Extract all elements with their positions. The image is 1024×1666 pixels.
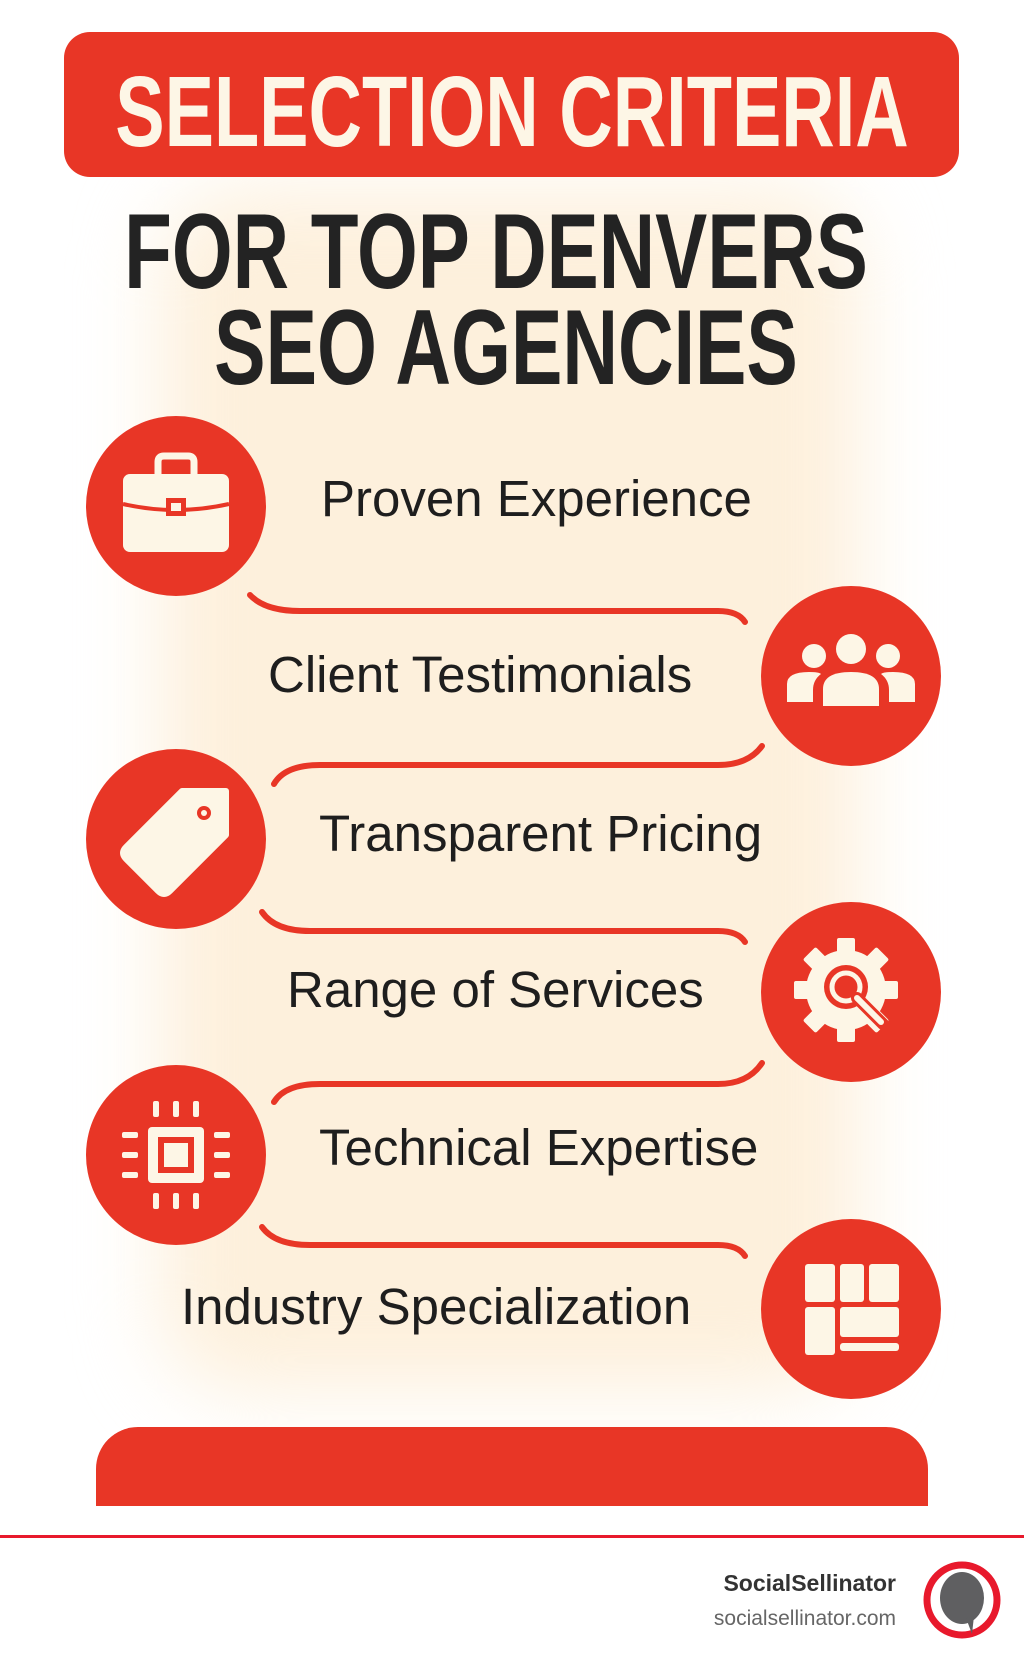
item 4: range of services <box>287 902 941 1082</box>
bottom bar <box>96 1427 928 1506</box>
header banner <box>64 32 959 177</box>
label: Technical Expertise <box>319 1119 758 1176</box>
icon: briefcase <box>86 416 266 596</box>
label: Range of Services <box>287 961 704 1018</box>
item 2: client testimonials <box>268 586 941 766</box>
title: SEO AGENCIES <box>214 287 798 407</box>
icon: gear with magnifier <box>761 902 941 1082</box>
header banner: SELECTION CRITERIA <box>115 56 909 168</box>
item 1: proven experience <box>86 416 752 596</box>
label: Industry Specialization <box>181 1278 691 1335</box>
footer brand: SocialSellinator <box>723 1570 896 1596</box>
label: Transparent Pricing <box>319 805 762 862</box>
label: Client Testimonials <box>268 646 692 703</box>
item 5: technical expertise <box>86 1065 758 1245</box>
label: Proven Experience <box>321 470 752 527</box>
title: FOR TOP DENVERS <box>124 191 868 311</box>
footer brand <box>714 1570 896 1630</box>
icon: grid <box>761 1219 941 1399</box>
icon: price tag <box>86 749 266 929</box>
item 3: transparent pricing <box>86 749 762 929</box>
title <box>124 191 868 407</box>
logo <box>924 1562 1000 1638</box>
icon: chip <box>86 1065 266 1245</box>
footer brand: socialsellinator.com <box>714 1607 896 1630</box>
icon: people <box>761 586 941 766</box>
item 6: industry specialization <box>181 1219 941 1399</box>
